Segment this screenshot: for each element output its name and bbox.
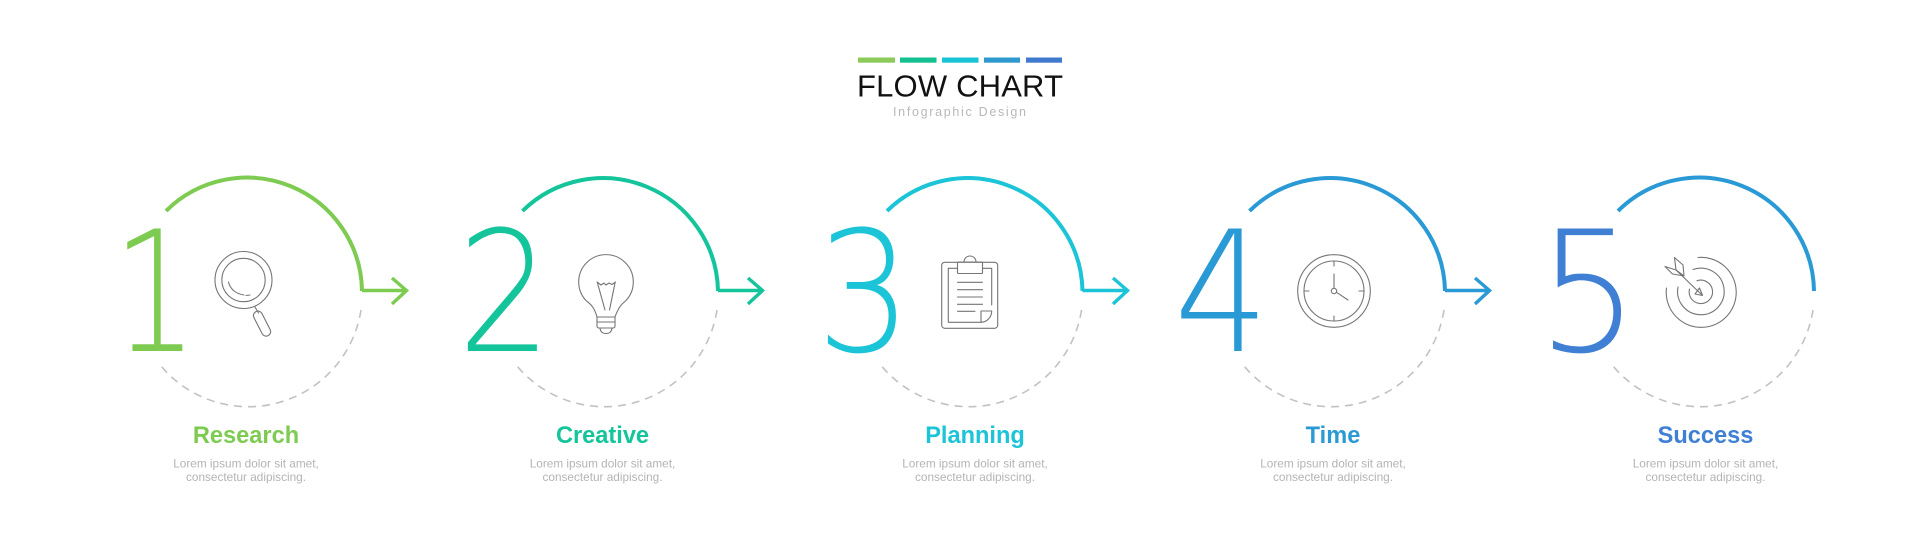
step label: Success — [1658, 423, 1753, 449]
arrow — [1445, 278, 1490, 304]
number 5: 5 — [1537, 195, 1639, 391]
step description: Lorem ipsum dolor sit amet, — [1260, 456, 1406, 470]
subtitle: Infographic Design — [893, 105, 1026, 119]
arrow — [362, 278, 406, 304]
dashed return arc — [161, 310, 361, 407]
step label: Research — [193, 423, 299, 449]
icon: magnifying glass — [215, 252, 272, 338]
progress arc — [522, 178, 718, 291]
arrow — [718, 278, 762, 304]
step 1: research — [112, 178, 406, 484]
progress arc — [1618, 178, 1814, 291]
step description: consectetur adipiscing. — [1273, 470, 1393, 484]
dashed return arc — [1244, 310, 1444, 407]
icon: clipboard — [942, 256, 998, 328]
title: FLOW CHART — [857, 69, 1063, 104]
step 2: creative — [458, 178, 762, 484]
dashed return arc — [1613, 310, 1813, 407]
step description: Lorem ipsum dolor sit amet, — [1633, 456, 1778, 470]
step description: consectetur adipiscing. — [915, 470, 1035, 484]
arrow — [1082, 278, 1128, 304]
icon: clock — [1298, 255, 1370, 327]
step description: Lorem ipsum dolor sit amet, — [902, 456, 1048, 470]
step description — [530, 456, 675, 484]
step description — [1633, 456, 1778, 484]
colour bars — [858, 58, 1062, 63]
step description: consectetur adipiscing. — [186, 470, 306, 484]
icon: light bulb — [579, 255, 633, 334]
step 5: success — [1537, 178, 1814, 484]
step label: Creative — [556, 423, 649, 449]
progress arc — [1250, 178, 1445, 291]
step label: Planning — [925, 423, 1025, 449]
step description: Lorem ipsum dolor sit amet, — [173, 456, 319, 470]
number 4: 4 — [1174, 195, 1269, 391]
step 4: time — [1174, 178, 1490, 484]
number 3: 3 — [816, 195, 912, 391]
step label: Time — [1306, 423, 1360, 449]
dashed return arc — [882, 310, 1082, 407]
progress arc — [887, 178, 1082, 291]
step 3: planning — [816, 178, 1128, 484]
step description — [173, 456, 319, 484]
number 1: 1 — [112, 195, 198, 391]
number 2: 2 — [458, 196, 552, 391]
progress arc — [166, 178, 362, 291]
step description: consectetur adipiscing. — [542, 470, 663, 484]
dashed return arc — [517, 310, 717, 407]
step description — [902, 456, 1048, 484]
step description — [1260, 456, 1406, 484]
header: title block — [857, 58, 1063, 119]
icon: target with arrow — [1665, 257, 1736, 327]
step description: consectetur adipiscing. — [1645, 470, 1766, 484]
step description: Lorem ipsum dolor sit amet, — [530, 456, 675, 470]
